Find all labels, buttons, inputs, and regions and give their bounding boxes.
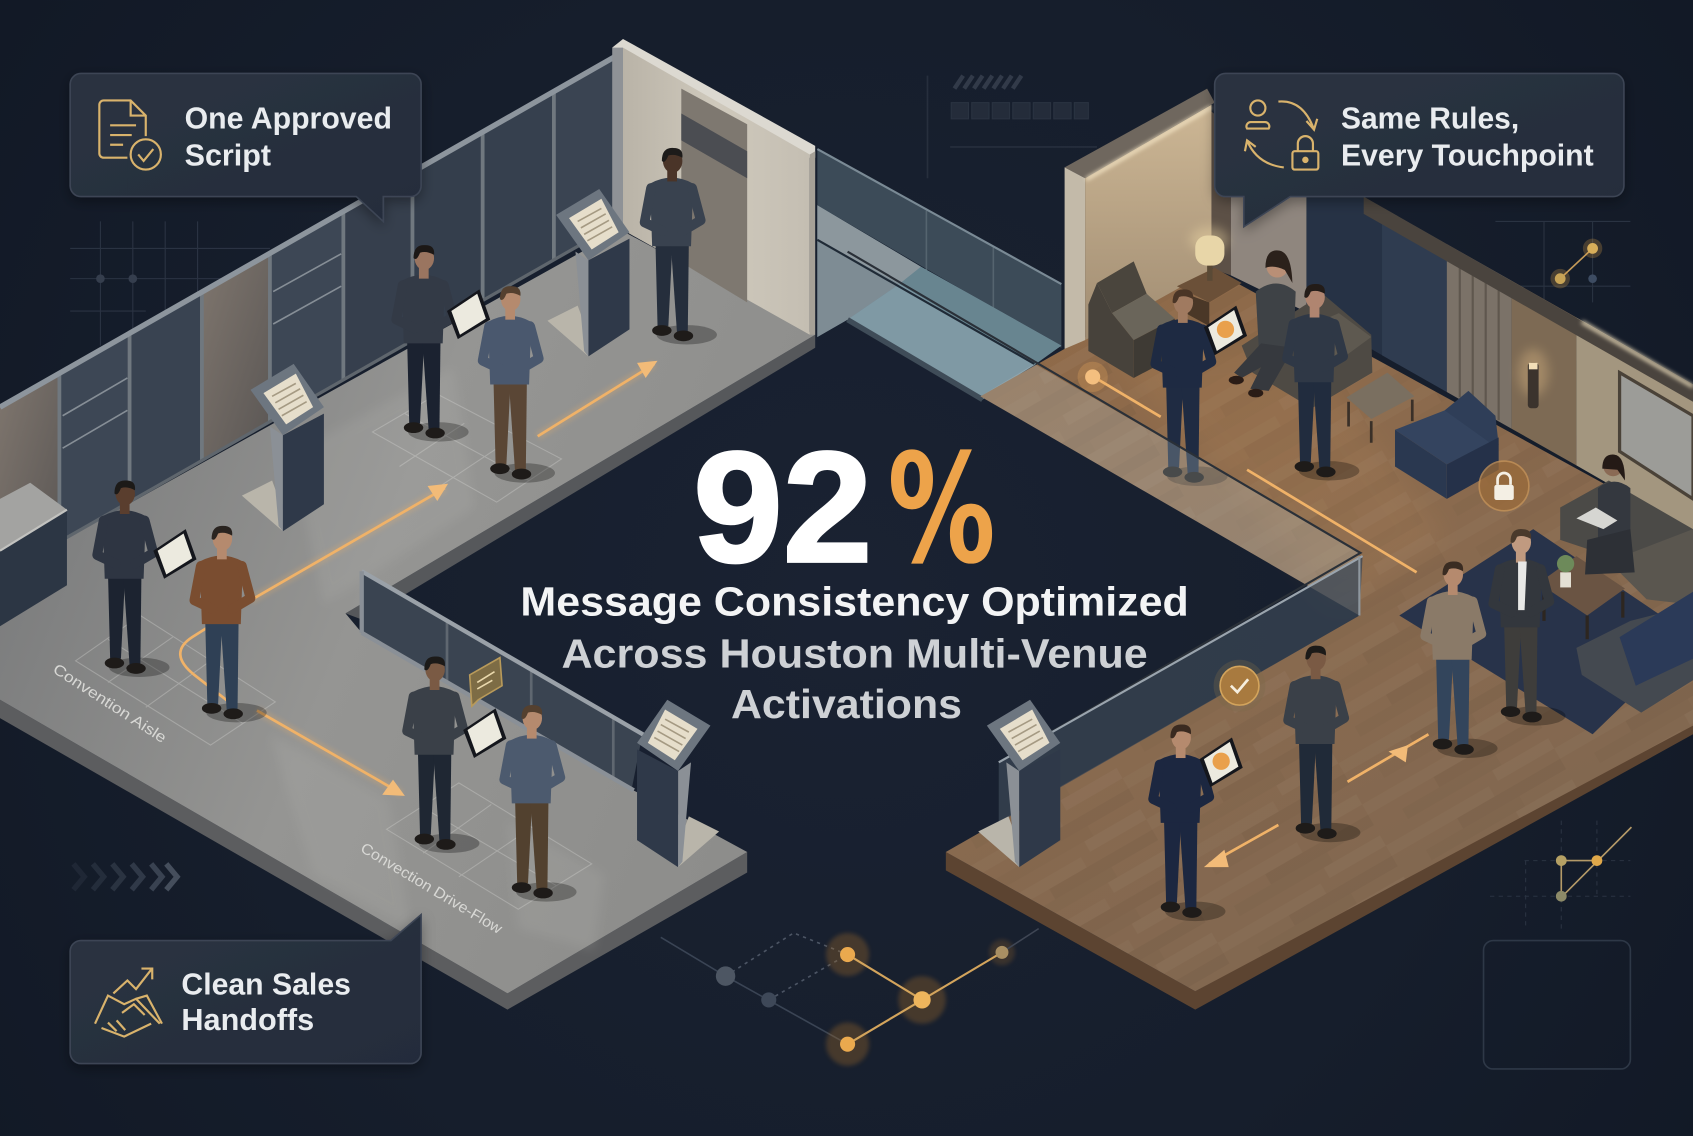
visitor: navy suit with tablet (1155, 289, 1228, 486)
decorative plant (1557, 555, 1574, 587)
label: Handoffs (181, 1004, 314, 1037)
glass rail: right venue (848, 252, 1363, 823)
right venue: hotel lounge floor (946, 267, 1693, 1010)
tablet: script (447, 289, 490, 339)
right venue: back wall (1207, 108, 1693, 532)
left venue: convention floor (0, 230, 815, 1010)
furniture: blue armchair (1395, 391, 1499, 499)
visitor: blue blazer (483, 286, 555, 483)
furniture: coffee table (1346, 373, 1414, 443)
staff: man with tablet (97, 480, 170, 677)
tablet: script (153, 529, 197, 579)
seated staff: woman with laptop (1576, 455, 1635, 574)
decoration: left grid (70, 221, 270, 346)
label: One Approved (185, 103, 392, 136)
left venue: back wall panels (0, 55, 618, 576)
staff: man at lower aisle (407, 656, 479, 853)
kiosk: left venue back (547, 189, 629, 356)
furniture: sofa (1242, 294, 1372, 408)
staff: woman at end wall (645, 148, 717, 344)
decoration: top right nodes (1495, 221, 1630, 302)
callout: same rules (1215, 73, 1624, 227)
upper arm edge (346, 335, 815, 620)
kiosk: left venue middle (242, 364, 324, 531)
left venue: counter (0, 483, 67, 626)
icon: people and lock cycle (1245, 100, 1318, 170)
label: Clean Sales (181, 968, 351, 1001)
callout: one approved script (70, 73, 421, 221)
left venue: end wall with door (612, 39, 815, 335)
label: Same Rules, (1341, 103, 1519, 136)
furniture: side table and lamp (1177, 227, 1242, 326)
staff: man by sofa (1287, 284, 1359, 481)
right venue: rug and lounge set (1399, 481, 1693, 734)
visitor: slate blazer (504, 705, 577, 902)
visitor: beige sweater (1425, 561, 1498, 758)
host: grey suit (1493, 529, 1566, 726)
glass rail: left venue lower (362, 571, 645, 790)
central headline: Activations (731, 681, 962, 727)
icon: handshake and rising chart (95, 969, 162, 1037)
kiosk: left venue front (637, 700, 719, 867)
floor reflections (270, 367, 605, 950)
left venue: glowing path arrows (180, 361, 658, 796)
label: Script (185, 139, 271, 172)
central headline: Across Houston Multi-Venue (561, 630, 1148, 676)
icon: approved document (99, 100, 161, 170)
floor label: convection drive-flow: Convection Drive-Flow (357, 840, 505, 938)
staff: woman with tablet (396, 245, 469, 442)
tablet: chart (463, 708, 506, 758)
icon: note bubble (470, 658, 502, 706)
glass bridge between venues (817, 149, 1061, 400)
furniture: grey armchair (1088, 261, 1175, 378)
badge: lock (1479, 461, 1529, 511)
decoration: chevrons (73, 864, 177, 890)
central statistic: 92 percent: 92 (693, 420, 872, 596)
floor tile grids (76, 394, 592, 909)
decoration: top hatch and dots (927, 76, 1097, 178)
decoration: outlined square (1484, 941, 1630, 1069)
floor side edges (0, 700, 747, 1010)
network of glowing nodes (661, 929, 1039, 1066)
staff: man with clipboard (1288, 646, 1360, 842)
tablet: orange logo (1204, 306, 1247, 355)
glowing path: right venue (1078, 362, 1428, 867)
central statistic: 92 percent: % (888, 422, 996, 598)
badge: check (1214, 660, 1265, 712)
visitor: navy suit (1153, 724, 1225, 921)
central statistic: 92 percent (693, 420, 996, 598)
label: Every Touchpoint (1341, 139, 1594, 172)
kiosk: right venue front (978, 700, 1060, 867)
right venue: end wall (1065, 89, 1215, 349)
callout: clean sales handoffs (70, 915, 421, 1064)
central headline (520, 579, 1189, 727)
seated staff: woman on sofa (1229, 250, 1296, 397)
decoration: bottom right nodes (1490, 821, 1631, 929)
tablet: orange logo (1200, 738, 1243, 787)
visitor: brown sweater (194, 526, 267, 722)
central headline: Message Consistency Optimized (520, 579, 1189, 625)
concrete floor (0, 230, 815, 993)
right venue: wall sconce (1518, 349, 1548, 408)
floor label: convention aisle: Convention Aisle (50, 661, 169, 747)
